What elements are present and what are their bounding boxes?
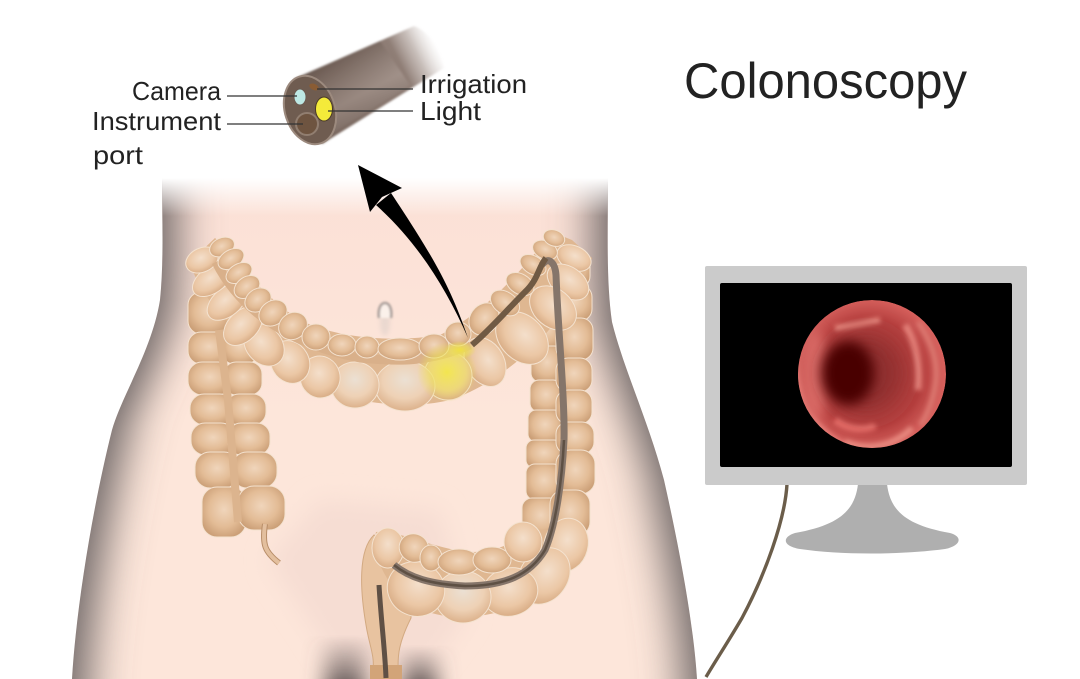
label: irrigation: Irrigation <box>420 69 527 99</box>
label: instrument port <box>92 106 222 170</box>
groin shading <box>290 516 446 654</box>
colon <box>182 227 595 679</box>
instrument port <box>296 113 318 135</box>
label: instrument port: Instrument <box>92 106 222 136</box>
irrigation channel <box>308 82 320 92</box>
camera lens <box>294 89 306 105</box>
monitor screen <box>720 283 1012 467</box>
monitor cable <box>706 484 787 677</box>
monitor frame <box>705 266 1027 485</box>
arrow <box>358 165 468 338</box>
sigmoid colon <box>375 530 560 617</box>
light glow <box>417 341 477 402</box>
ascending colon <box>188 292 285 537</box>
label: instrument port: port <box>93 140 144 170</box>
endoscope tip <box>275 26 444 151</box>
light lens <box>316 97 332 121</box>
endoscopic view <box>790 300 946 455</box>
descending colon <box>522 250 595 536</box>
label: light: Light <box>420 96 482 126</box>
monitor stand <box>786 484 959 554</box>
rectum <box>362 535 411 679</box>
transverse colon inner haustra <box>206 227 567 360</box>
ascending taenia strip <box>219 330 238 522</box>
transverse colon base <box>190 232 592 405</box>
tube <box>294 26 444 144</box>
navel <box>379 303 391 336</box>
colonoscope in colon <box>379 258 564 678</box>
label: camera: Camera <box>132 76 222 106</box>
torso body <box>72 180 697 679</box>
title: Colonoscopy <box>684 53 967 109</box>
monitor <box>705 266 1027 677</box>
transverse colon outer haustra <box>182 240 595 411</box>
lens face <box>275 69 345 151</box>
appendix <box>264 524 279 563</box>
transverse taenia strip <box>216 262 470 360</box>
label lines <box>227 89 413 124</box>
